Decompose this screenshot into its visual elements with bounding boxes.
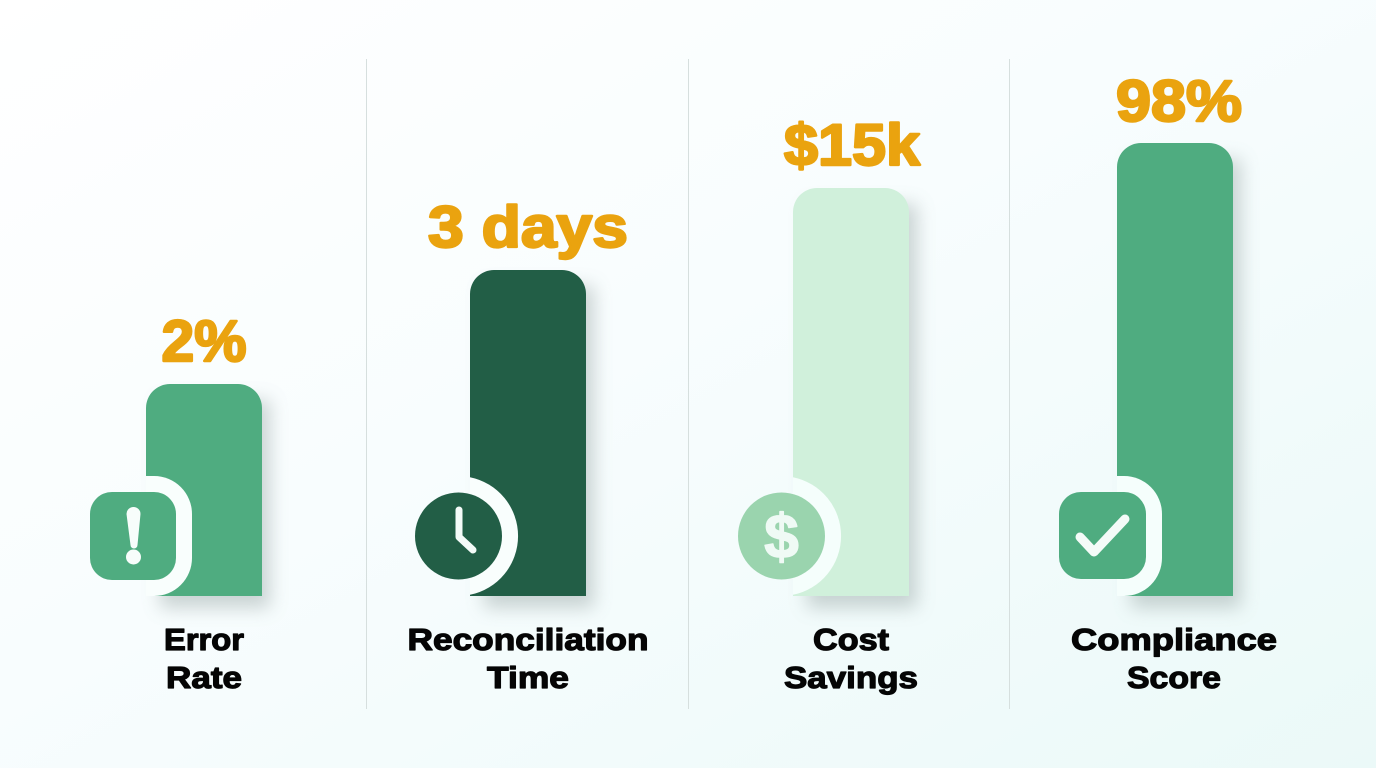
label: reconciliation time: Time (487, 660, 569, 695)
label: compliance score: Compliance (1071, 622, 1277, 657)
value: 3 days: 3 days (428, 195, 628, 260)
label: compliance score: Score (1127, 660, 1221, 695)
icon: check badge (1059, 476, 1162, 596)
bar: cost savings (793, 188, 917, 608)
label: reconciliation time: Reconciliation (408, 622, 648, 657)
panel: compliance score (1059, 69, 1277, 695)
panel: error rate (90, 309, 270, 695)
label: error rate: Error (164, 622, 244, 657)
panel: cost savings (738, 113, 921, 695)
icon: warning badge (90, 476, 192, 596)
icon: clock badge (415, 477, 518, 595)
bar: reconciliation time (470, 270, 594, 608)
panel: reconciliation time (408, 195, 648, 695)
label: error rate (164, 622, 244, 695)
value: $15k: $15k (784, 113, 921, 178)
icon: dollar badge: $ (764, 503, 799, 572)
value: 98%: 98% (1116, 69, 1242, 134)
label: cost savings: Savings (784, 660, 918, 695)
value: 2%: 2% (162, 309, 246, 374)
bar: compliance score (1117, 143, 1241, 608)
label: cost savings (784, 622, 918, 695)
label: compliance score (1071, 622, 1277, 695)
label: error rate: Rate (166, 660, 242, 695)
label: cost savings: Cost (813, 622, 889, 657)
bar: error rate (146, 384, 270, 608)
label: reconciliation time (408, 622, 648, 695)
icon: dollar badge (738, 477, 841, 595)
